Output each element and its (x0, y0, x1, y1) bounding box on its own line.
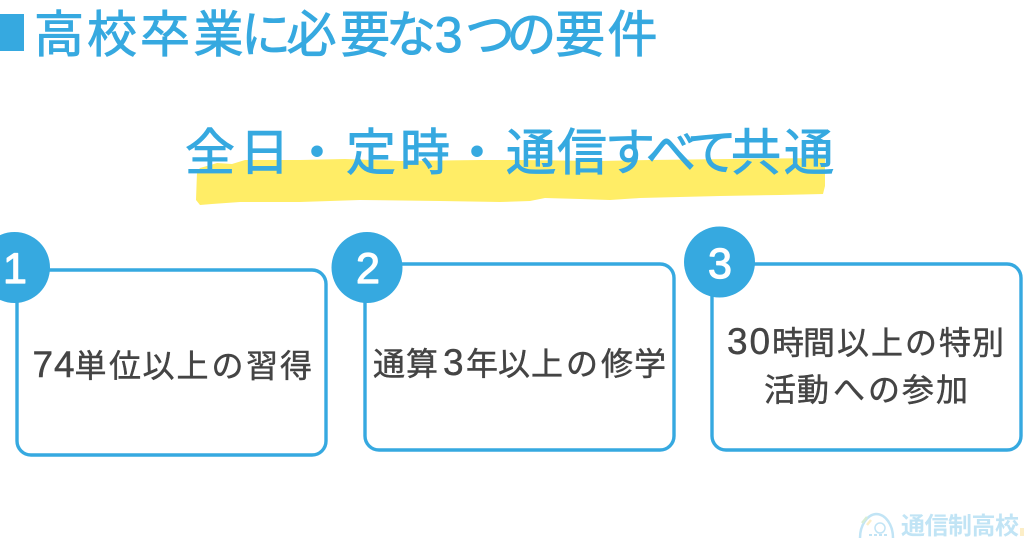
icon: logo mark (860, 514, 893, 538)
subheading: 全日・定時・通信すべて共通 (185, 125, 834, 181)
badge 2: 2 (356, 245, 380, 293)
badge 3 (684, 226, 755, 298)
requirement 2 text: 通算3年以上の修学 (373, 342, 666, 383)
watermark logo (860, 513, 1024, 538)
badge 1 (0, 232, 50, 303)
badge 2 (332, 232, 402, 303)
requirement 1 text: 74単位以上の習得 (32, 344, 312, 385)
watermark accent (1020, 528, 1024, 536)
panel: requirement 3 (684, 226, 1021, 450)
title: 高校卒業に必要な3つの要件 (34, 7, 658, 63)
requirement 3 text (727, 321, 1004, 408)
badge 1: 1 (3, 245, 27, 293)
requirement 3 text: 活動への参加 (764, 372, 968, 408)
panel: requirement 1 (0, 232, 326, 455)
requirement 3 text: 30時間以上の特別 (727, 321, 1004, 362)
badge 3: 3 (708, 240, 732, 288)
panel: requirement 2 (332, 232, 674, 450)
highlight brush (196, 158, 825, 205)
